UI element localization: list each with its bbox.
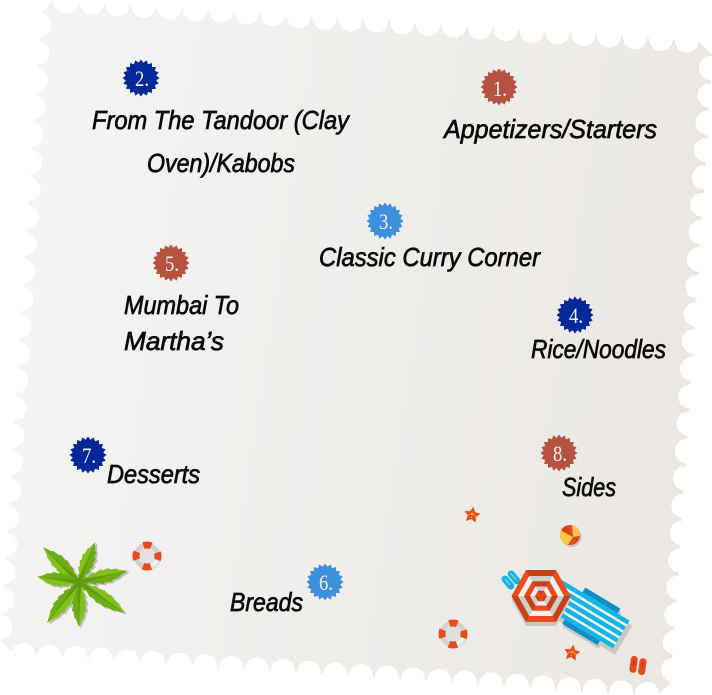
item 5: Mumbai To Martha's — [124, 244, 239, 356]
badge 3 — [366, 202, 404, 240]
badge 6: 6. — [319, 570, 333, 595]
badge 4: 4. — [569, 303, 583, 328]
icon: red flip-flops — [629, 655, 647, 676]
item 3: Classic Curry Corner — [319, 202, 541, 272]
heading: Classic Curry Corner: Classic Curry Corner — [319, 242, 541, 272]
icon: starfish bottom — [563, 643, 581, 661]
item 1: Appetizers/Starters — [442, 68, 657, 144]
heading: From The Tandoor (Clay Oven)/Kabobs — [92, 105, 351, 178]
heading: Mumbai To Martha's: Martha’s — [124, 326, 224, 356]
heading: Appetizers/Starters: Appetizers/Starters — [442, 114, 657, 144]
heading: From The Tandoor (Clay Oven)/Kabobs: Oven)/Kabobs — [147, 148, 295, 178]
icon: palm tree — [36, 539, 131, 629]
icon: blue flip-flops — [500, 569, 522, 591]
item 4: Rice/Noodles — [531, 296, 666, 364]
icon: life buoy top — [134, 544, 162, 570]
badge 1 — [480, 68, 518, 106]
heading: Breads: Breads — [230, 587, 303, 617]
heading: From The Tandoor (Clay Oven)/Kabobs: From The Tandoor (Clay — [92, 105, 351, 135]
badge 3: 3. — [379, 209, 393, 234]
badge 1: 1. — [493, 76, 507, 101]
icon: beach umbrella — [512, 570, 570, 626]
badge 7: 7. — [82, 443, 96, 468]
heading: Mumbai To Martha's — [124, 290, 239, 356]
heading: Mumbai To Martha's: Mumbai To — [124, 290, 239, 320]
item 2: From The Tandoor — [92, 60, 351, 178]
badge 2: 2. — [135, 66, 149, 91]
icon: starfish top — [463, 505, 481, 523]
badge 2 — [122, 60, 160, 96]
icon: life buoy bottom — [440, 622, 468, 648]
icon: beach ball — [560, 525, 582, 547]
badge 8: 8. — [553, 441, 567, 466]
heading: Rice/Noodles: Rice/Noodles — [531, 334, 666, 364]
heading: Sides: Sides — [562, 472, 616, 502]
item 6: Breads — [230, 564, 344, 617]
heading: Desserts: Desserts — [107, 459, 200, 489]
icon: beach towel — [538, 573, 637, 657]
item 7: Desserts — [70, 436, 200, 489]
badge 5: 5. — [165, 251, 179, 276]
item 8: Sides — [540, 434, 616, 502]
